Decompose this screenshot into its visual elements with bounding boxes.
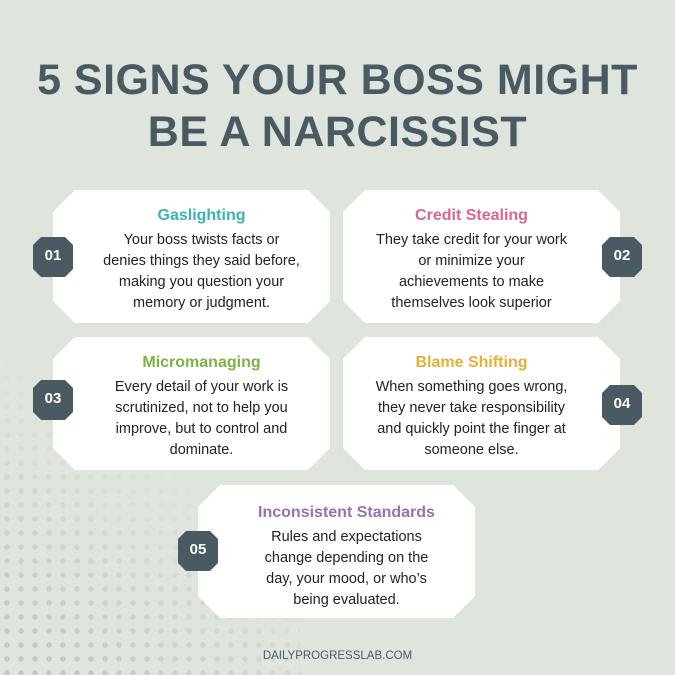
panel: gaslighting: denies things they said before, [103, 253, 300, 269]
panel: inconsistent standards: Inconsistent Standards [258, 504, 435, 521]
panel: blame shifting [343, 337, 620, 470]
panel: inconsistent standards: change depending on the [265, 550, 428, 566]
panel: credit stealing [343, 190, 620, 323]
badge 03: 03 [45, 390, 61, 407]
panel: blame shifting: When something goes wrong, [376, 379, 567, 395]
badge 05 [178, 531, 218, 571]
panel: credit stealing: Credit Stealing [415, 207, 528, 224]
panel: inconsistent standards: day, your mood, or who’s [266, 571, 427, 587]
badge 02: 02 [614, 247, 630, 264]
panel: inconsistent standards [198, 485, 475, 618]
panel: micromanaging: Every detail of your work is [115, 379, 288, 395]
title [37, 56, 638, 156]
panel: inconsistent standards: being evaluated. [293, 592, 400, 608]
panel: blame shifting: and quickly point the finger at [377, 421, 566, 437]
panel: gaslighting: Gaslighting [158, 207, 246, 224]
badge 01: 01 [45, 247, 61, 264]
panel: micromanaging: improve, but to control and [116, 421, 287, 437]
panel: gaslighting: making you question your [119, 274, 284, 290]
panel: credit stealing: themselves look superior [391, 295, 552, 311]
panel: blame shifting: someone else. [424, 442, 519, 458]
panel: credit stealing: or minimize your [418, 253, 525, 269]
panel: blame shifting: Blame Shifting [415, 354, 528, 371]
panel: gaslighting: Your boss twists facts or [124, 232, 279, 248]
panel: micromanaging: dominate. [170, 442, 233, 458]
panel: blame shifting: they never take responsibility [378, 400, 565, 416]
panel: micromanaging: Micromanaging [142, 354, 261, 371]
title: BE A NARCISSIST [148, 108, 527, 156]
panel: inconsistent standards: Rules and expectations [271, 529, 422, 545]
title: 5 SIGNS YOUR BOSS MIGHT [37, 56, 638, 104]
badge 01 [33, 237, 73, 277]
badge 04 [602, 385, 642, 425]
panel: credit stealing: achievements to make [399, 274, 544, 290]
panel: credit stealing: They take credit for your work [376, 232, 567, 248]
panel: gaslighting [53, 190, 330, 323]
badge 05: 05 [190, 541, 206, 558]
panel: micromanaging [53, 337, 330, 470]
footer: DAILYPROGRESSLAB.COM [263, 650, 412, 662]
panel: micromanaging: scrutinized, not to help you [115, 400, 288, 416]
badge 04: 04 [614, 395, 630, 412]
badge 02 [602, 237, 642, 277]
badge 03 [33, 380, 73, 420]
panel: gaslighting: memory or judgment. [133, 295, 270, 311]
